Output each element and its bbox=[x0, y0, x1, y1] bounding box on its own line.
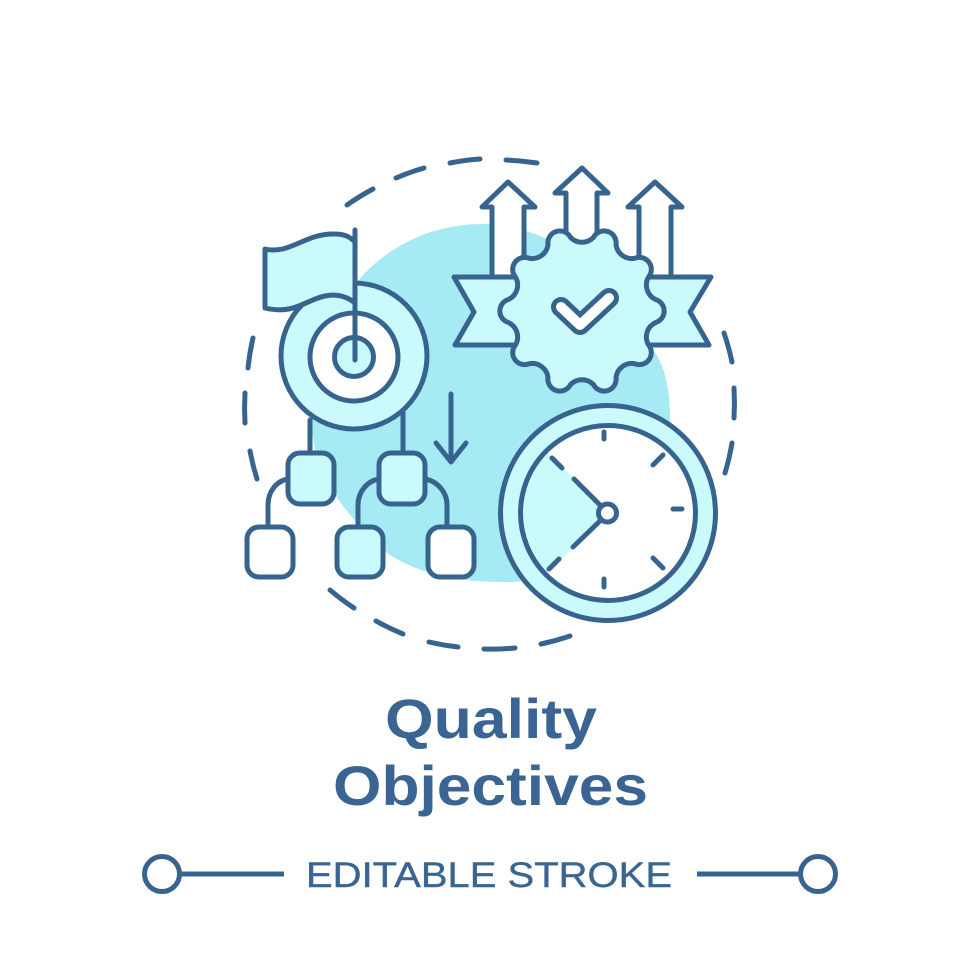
quality badge with ribbon bbox=[454, 231, 711, 391]
title: Objectives bbox=[333, 754, 648, 817]
editable stroke footer bbox=[144, 856, 836, 895]
clock bbox=[500, 406, 716, 620]
arrow: down bbox=[436, 394, 466, 462]
icon: check mark bbox=[561, 298, 609, 325]
three up arrows bbox=[482, 168, 682, 280]
target with flag bbox=[265, 230, 427, 429]
title: Quality bbox=[385, 687, 597, 750]
editable stroke footer: EDITABLE STROKE bbox=[306, 856, 672, 895]
dashed circle bbox=[245, 159, 734, 649]
background blob bbox=[312, 224, 670, 582]
title bbox=[333, 687, 648, 817]
org chart bbox=[247, 410, 474, 577]
